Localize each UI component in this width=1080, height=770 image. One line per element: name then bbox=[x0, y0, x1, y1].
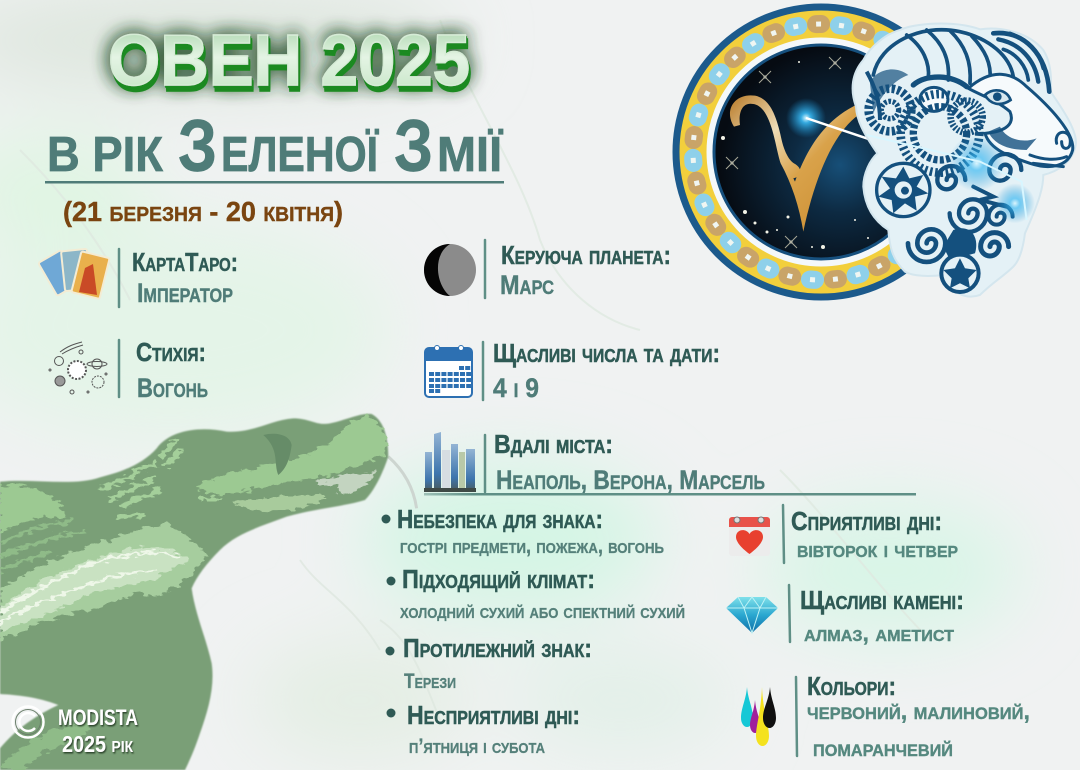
item: element bbox=[49, 337, 208, 403]
ram silhouette bbox=[853, 24, 1076, 297]
item: unfavourable days bbox=[386, 700, 580, 758]
value: favourable days: вівторок і четвер bbox=[797, 536, 958, 562]
credit year: 2025 рік bbox=[62, 731, 133, 757]
mane ornament bbox=[867, 72, 983, 173]
value: colours line 2: помаранчевий bbox=[813, 735, 953, 762]
snake tongue bbox=[388, 457, 417, 508]
bullet bbox=[386, 646, 394, 656]
value: danger: гострі предмети, пожежа, вогонь bbox=[400, 535, 664, 558]
icon: heart calendar bbox=[729, 517, 770, 556]
value: emperor: Імператор bbox=[137, 278, 233, 308]
snout highlight bbox=[0, 416, 387, 570]
title: Oven 2025: ОВЕН 2025 bbox=[108, 21, 470, 101]
horn ribs bbox=[873, 30, 1049, 92]
zodiac medallion bbox=[676, 7, 985, 297]
left body patch bbox=[0, 484, 67, 533]
snake illustration bbox=[0, 414, 417, 770]
item: opposite sign bbox=[386, 633, 592, 693]
item: favourable days bbox=[729, 505, 958, 563]
item: colours bbox=[741, 671, 1030, 762]
aries glyph bbox=[730, 95, 858, 232]
icon: cosmic doodle bbox=[49, 342, 107, 394]
snake body bbox=[0, 414, 388, 770]
label: favourable days: Сприятливі дні: bbox=[791, 506, 942, 536]
bullet bbox=[386, 708, 396, 718]
item: ruling planet bbox=[424, 240, 671, 300]
subtitle: year of the Green Snake bbox=[47, 106, 503, 187]
icon: tarot cards bbox=[38, 249, 110, 299]
light burst bbox=[867, 135, 1035, 223]
icon: calendar bbox=[425, 346, 472, 397]
item: lucky numbers bbox=[425, 338, 720, 403]
bottom medallion bbox=[941, 255, 979, 292]
label: danger: Небезпека для знака: bbox=[397, 504, 603, 534]
value: cities: Неаполь, Верона, Марсель bbox=[496, 465, 765, 495]
item: climate bbox=[386, 564, 685, 623]
icon: planet bbox=[424, 244, 476, 296]
icon: ink drops bbox=[741, 687, 776, 746]
ornamental ring bbox=[676, 7, 966, 297]
ram face bbox=[968, 74, 1073, 167]
subtitle: year of the Green Snake: МІЇ bbox=[437, 128, 503, 182]
subtitle: year of the Green Snake: ЕЛЕНОЇ bbox=[221, 128, 379, 182]
icon: copyright bbox=[12, 706, 44, 738]
sun medallion bbox=[877, 163, 930, 217]
value: Libra: Терези bbox=[404, 670, 456, 693]
label: ruling planet: Керуюча планета: bbox=[501, 240, 671, 270]
copyright mark bbox=[12, 705, 138, 757]
value: colours line 1: червоний, малиновий, bbox=[807, 698, 1030, 725]
subtitle: year of the Green Snake: З bbox=[178, 106, 217, 187]
value: unfavourable days: п’ятниця і субота bbox=[409, 735, 545, 758]
horn base fill bbox=[870, 69, 908, 113]
ram head bbox=[853, 24, 1076, 297]
bullet bbox=[386, 576, 396, 586]
bullet bbox=[382, 514, 390, 524]
item: lucky stones bbox=[726, 585, 964, 646]
subtitle: year of the Green Snake: З bbox=[394, 106, 433, 187]
teeth bbox=[317, 472, 375, 495]
lower curls bbox=[908, 154, 1021, 262]
label: element: Стихія: bbox=[136, 337, 206, 367]
label: tarot: КартаТаро: bbox=[132, 247, 238, 277]
icon: skyscrapers bbox=[424, 432, 476, 492]
eye bbox=[263, 434, 292, 475]
stars bbox=[721, 61, 869, 249]
label: distant cities: Вдалі міста: bbox=[494, 429, 613, 459]
item: danger bbox=[382, 504, 664, 558]
value: Mars: Марс bbox=[500, 270, 554, 300]
lower coil highlight bbox=[0, 722, 90, 770]
ear bbox=[913, 77, 967, 87]
label: colours: Кольори: bbox=[807, 671, 896, 701]
light streak bbox=[786, 98, 985, 178]
item: distant cities bbox=[424, 429, 765, 495]
neck scales bbox=[100, 440, 220, 517]
date range: (21 березня - 20 квітня) bbox=[63, 196, 343, 227]
item: tarot card bbox=[38, 247, 238, 308]
value: climate: холодний сухий або спектний сухий bbox=[400, 600, 685, 623]
subtitle: year of the Green Snake: В РІК bbox=[47, 128, 163, 182]
label: opposite sign: Протилежний знак: bbox=[403, 633, 592, 663]
label: unfavourable days: Несприятливі дні: bbox=[407, 700, 580, 730]
label: lucky numbers: Щасливі числа та дати: bbox=[493, 338, 720, 368]
value: stones: алмаз, аметист bbox=[804, 620, 954, 646]
value: 4 and 9: 4 і 9 bbox=[493, 373, 539, 403]
belly highlight bbox=[0, 523, 207, 640]
value: fire: Вогонь bbox=[137, 373, 208, 403]
night sky disc bbox=[714, 45, 928, 259]
label: lucky stones: Щасливі камені: bbox=[800, 585, 964, 615]
icon: diamond bbox=[726, 597, 778, 633]
label: climate: Підходящий клімат: bbox=[402, 564, 595, 594]
credit name: MODISTA bbox=[58, 705, 138, 730]
